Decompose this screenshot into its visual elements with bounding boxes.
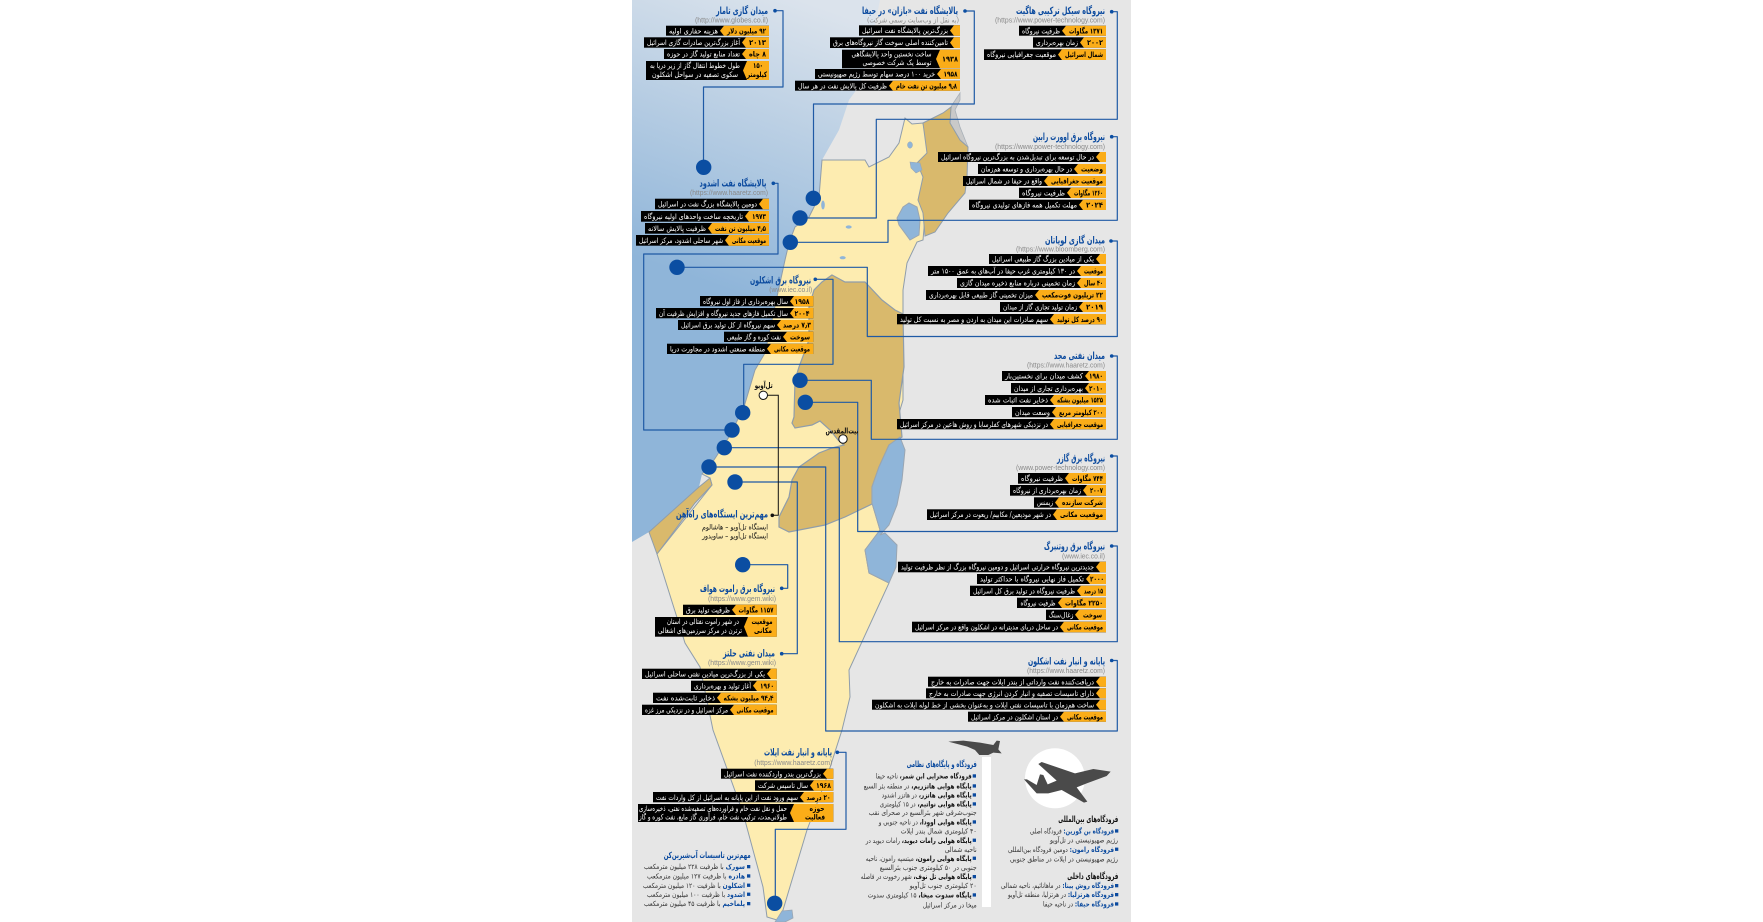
panel: Ramot Hovav power plant — [655, 582, 777, 637]
data rows: ظرفیت نیروگاه — [1020, 598, 1056, 607]
data rows: بزرگ‌ترین پالایشگاه نفت اسرائیل — [862, 25, 948, 35]
data rows: ۲۲ تریلیون فوت‌مکعب — [1042, 291, 1103, 300]
domestic airports list: فرودگاه روش پینا: در ماهانائیم، ناحیه شمالی — [1001, 881, 1114, 890]
data rows — [938, 152, 1106, 210]
data rows: در ساحل دریای مدیترانه در اشکلون واقع در مرکز اسرائیل — [915, 623, 1058, 632]
leader line: Rutenberg — [724, 448, 1117, 642]
data rows: منطقه صنعتی اشدود در مجاورت دریا — [670, 344, 765, 353]
data rows: ظرفیت نیروگاه — [1022, 26, 1060, 35]
base list: جنوبی در ۵۰ کیلومتری جنوب بئرالسبع — [880, 864, 977, 872]
data rows: ۲۰۰۷ — [1090, 486, 1103, 495]
data rows: کشف میدان برای نخستین‌بار — [1004, 372, 1083, 381]
data rows: آغاز بزرگ‌ترین صادرات گازی اسرائیل — [647, 37, 741, 47]
data rows: موقعیت مکانی — [736, 705, 774, 714]
data rows: طولانی‌مدت، ترکیب نفت خام، فرآوری گاز مایع، نفت کوره و گاز — [638, 812, 787, 822]
station list — [701, 521, 768, 541]
source: (http://www.globes.co.il) — [695, 18, 768, 24]
data rows: موقعیت جغرافیایی — [1051, 177, 1103, 186]
leader line: Gezer — [805, 402, 1117, 532]
source: (www.iec.co.il) — [769, 287, 812, 294]
base list: فرودگاه صحرایی ابن شمر، ناحیه حیفا — [876, 772, 972, 780]
data rows: تامین‌کننده اصلی سوخت گاز نیروگاه‌های برق — [833, 38, 948, 47]
data rows — [656, 296, 813, 354]
panel: Ashkelon power plant — [656, 273, 813, 354]
source: (www.power-technology.com) — [1016, 465, 1105, 472]
data rows: موقعیت جغرافیایی — [1057, 420, 1103, 429]
data rows: شهر ساحلی اشدود، مرکز اسرائیل — [639, 236, 723, 245]
base list: پایگاه هوایی تل نوف، شهر رخووت در فاصله — [861, 872, 972, 881]
data rows: بهره‌برداری تجاری از میدان — [1014, 384, 1083, 393]
source: (https://www.haaretz.com) — [1027, 362, 1105, 370]
data rows: ظرفیت نیروگاه — [1021, 474, 1063, 483]
data rows: ۱۹۷۳ — [752, 212, 766, 221]
data rows: ترترن در مرکز سرزمین‌های اشغالی — [658, 626, 742, 635]
leader line: Heletz — [735, 482, 797, 654]
data rows: موقعیت — [752, 617, 773, 626]
data rows: ۱۹۸۰ — [1089, 372, 1103, 381]
source: (https://www.power-technology.com) — [995, 18, 1105, 24]
data rows: موقعیت مکانی — [1067, 712, 1103, 721]
data rows: زمان بهره‌برداری از نیروگاه — [1013, 486, 1081, 495]
white vertical strip — [982, 757, 991, 907]
data rows: هزینه حفاری اولیه — [669, 26, 718, 35]
data rows: در حال توسعه برای تبدیل‌شدن به بزرگ‌ترین نیروگاه اسرائیل — [941, 152, 1094, 162]
data rows: کیلومتر — [746, 70, 767, 79]
icon: fighter jet — [948, 741, 1002, 755]
data rows: ۱۹۵۸ — [944, 70, 958, 79]
data rows: حمل و نقل نفت خام و فراورده‌های تصفیه‌شده نفتی، ذخیره‌سازی — [639, 804, 787, 813]
base list: پایگاه هوایی هاتزریم، در منطقه بئر السبع — [864, 782, 972, 790]
leader line: Ashdod refinery — [644, 183, 778, 430]
leader line: Eilat — [775, 752, 846, 903]
data rows: ۱۹۳۸ — [942, 55, 958, 64]
data rows: یکی از میادین بزرگ گاز طبیعی اسرائیل — [992, 254, 1094, 264]
domestic airports list — [1001, 881, 1118, 908]
data rows: ۱۹۶۸ — [816, 781, 831, 790]
data rows: ۱۵۰ — [753, 61, 763, 70]
data rows: ۱۲۶۰ مگاوات — [1074, 188, 1103, 197]
data rows: موقعیت مکانی — [774, 344, 810, 353]
data rows: زمان تولید تجاری گاز از میدان — [1003, 303, 1077, 312]
base list: ناحیه شمالی — [945, 846, 977, 854]
data rows: دارای تاسیسات تصفیه و انبار کردن انرژی جهت صادرات به خارج — [929, 689, 1094, 698]
data rows: ۷٫۳ درصد — [783, 321, 811, 330]
data rows: سکوی تصفیه در سواحل اشکلون — [652, 70, 738, 79]
data rows: ۲۰۱۹ — [1086, 303, 1103, 312]
data rows: مرکز اسرائیل و در نزدیکی مرز غزه — [645, 705, 728, 714]
station list: ایستگاه تل‌آویو – ساویدور — [701, 531, 768, 541]
data rows: ۹۲ میلیون دلار — [726, 26, 766, 35]
international airports list: رژیم صهیونیستی در تل‌آویو — [1049, 836, 1118, 844]
data rows: سال تکمیل فازهای جدید نیروگاه و افزایش ظرفیت آن — [659, 308, 788, 318]
city: Tel Aviv: تل‌آویو — [754, 380, 773, 390]
leader line: Leviathan — [677, 241, 1117, 336]
data rows: جدیدترین نیروگاه حرارتی اسرائیل و دومین نیروگاه بزرگ از نظر ظرفیت تولید — [901, 562, 1094, 572]
leader line: Ramot Hovav — [743, 565, 788, 588]
source: (www.iec.co.il) — [1062, 554, 1105, 560]
data rows: سهم ورود نفت از این پایانه به اسرائیل از کل واردات نفت — [656, 793, 798, 802]
data rows — [984, 26, 1106, 60]
data rows: بزرگ‌ترین بندر واردکننده نفت اسرائیل — [724, 768, 821, 778]
data rows: توسط یک شرکت خصوصی — [862, 58, 932, 67]
source: (https://www.power-technology.com) — [995, 144, 1105, 151]
panel: Heletz oil field — [642, 649, 777, 715]
data rows: سوخت — [790, 332, 810, 341]
heading: مهم‌ترین ایستگاه‌های راه‌آهن — [676, 508, 768, 521]
source: (https://www.haaretz.com) — [690, 190, 768, 197]
heading: نیروگاه برق روتنبرگ — [1044, 540, 1105, 552]
data rows: ۱۹۶۰ — [760, 681, 774, 690]
station list: ایستگاه تل‌آویو – هاشالوم — [702, 521, 768, 531]
source: (https://www.gem.wiki) — [708, 596, 776, 603]
data rows: دریافت‌کننده نفت وارداتی از بندر ایلات جهت صادرات به خارج — [931, 677, 1094, 686]
data rows: در ۱۳۰ کیلومتری غرب حیفا در آب‌های به عمق ۱۵۰۰ متر — [930, 266, 1075, 276]
international airports list — [1008, 826, 1118, 864]
data rows: دومین پالایشگاه بزرگ نفت در اسرائیل — [658, 199, 757, 209]
base list: پایگاه هوایی نواتیم، در ۱۵ کیلومتری — [880, 800, 972, 808]
data rows — [638, 768, 833, 822]
base list: جنوب‌شرقی شهر بئرالسبع در صحرای نقب — [869, 809, 977, 817]
data rows: شرکت سازنده — [1062, 498, 1103, 507]
data rows: زغال‌سنگ — [1048, 610, 1074, 619]
data rows: زمان بهره‌برداری — [1036, 38, 1078, 47]
data rows: در حال بهره‌برداری و توسعه هم‌زمان — [981, 165, 1072, 174]
leader line: Bazan — [814, 11, 974, 198]
data rows: ۱۹۵۸ — [794, 297, 810, 306]
international airports list: رژیم صهیونیستی در ایلات در مناطق جنوبی — [1010, 856, 1118, 864]
heading: مهم‌ترین تاسیسات آب‌شیرین‌کن — [664, 849, 751, 861]
source: (https://www.haaretz.com) — [754, 760, 832, 767]
data rows — [898, 562, 1106, 632]
data rows: ۸ چاه — [749, 50, 766, 59]
city: Jerusalem: بیت‌المقدس — [826, 426, 858, 436]
data rows: ظرفیت نیروگاه — [1022, 188, 1065, 197]
source: (به نقل از وب‌سایت رسمی شرکت) — [867, 16, 959, 24]
data rows: موقعیت مکانی — [732, 236, 766, 245]
heading: international airports: فرودگاه‌های بین‌المللی — [1058, 814, 1118, 825]
data rows: ۲۰ درصد — [806, 793, 830, 802]
data rows: ۱۵۲۵ میلیون بشکه — [1057, 396, 1103, 405]
heading: domestic airports: فرودگاه‌های داخلی — [1067, 871, 1118, 882]
domestic airports list: فرودگاه هرتزلیا: در هرتزلیا، منطقه تل‌آویو — [1007, 890, 1114, 899]
location markers — [669, 9, 1113, 911]
data rows: ۱۱۵۷ مگاوات — [738, 605, 774, 614]
data rows: وضعیت — [1081, 165, 1103, 174]
data rows: تکمیل فاز نهایی نیروگاه با حداکثر تولید — [980, 575, 1084, 584]
heading: نیروگاه برق اشکلون — [750, 273, 811, 286]
data rows: طول خطوط انتقال گاز از زیر دریا به — [650, 61, 740, 70]
heading: نیروگاه برق راموت هواف — [700, 582, 775, 595]
data rows: ۲۲۵۰ مگاوات — [1065, 598, 1103, 607]
data rows: ذخایر نفت اثبات شده — [988, 396, 1048, 405]
panel: Ashdod refinery — [636, 177, 769, 246]
data rows: شمال اسرائیل — [1065, 50, 1103, 59]
panel: Leviathan gas field — [897, 234, 1106, 324]
city: Tel Aviv — [754, 380, 773, 399]
plant list — [643, 863, 750, 908]
data rows — [642, 668, 777, 715]
data rows: در نزدیکی شهرهای کفلرسابا و روش هاعین در مرکز اسرائیل — [900, 420, 1048, 429]
data rows: در شهر راموت نفتالی در استان — [667, 617, 739, 626]
panel: railway stations — [676, 508, 768, 541]
data rows: موقعیت مکانی — [1067, 623, 1103, 632]
data rows — [655, 605, 777, 637]
data rows: ۱۵ درصد — [1084, 586, 1103, 595]
data rows: ۲۰۲۴ — [1086, 200, 1103, 209]
panel: Bazan refinery — [795, 4, 960, 91]
leader line: Ashkelon terminal — [709, 467, 1117, 731]
data rows: موقعیت جغرافیایی نیروگاه — [987, 50, 1056, 59]
data rows: ۹۴٫۴ میلیون بشکه — [724, 693, 774, 702]
data rows: سهم نیروگاه از کل تولید برق اسرائیل — [681, 321, 775, 330]
data rows: سوخت — [1083, 610, 1102, 619]
data rows — [644, 26, 769, 80]
heading: فرودگاه و پایگاه‌های نظامی — [907, 759, 977, 770]
leader line: Hagit — [800, 12, 1117, 218]
heading: میدان نفتی مجد — [1054, 351, 1105, 362]
leader line: railway — [767, 395, 778, 515]
data rows: ساخت نخستین واحد پالایشگاهی — [852, 50, 932, 59]
data rows: ظرفیت تولید برق — [686, 605, 730, 614]
data rows: در استان اشکلون در مرکز اسرائیل — [971, 712, 1058, 721]
leader line: Ashkelon power plant — [744, 279, 833, 413]
data rows: ۲۰۱۰ — [1089, 384, 1103, 393]
base list: پایگاه هوایی اووِدا، در ناحیه جنوبی و — [878, 818, 972, 827]
data rows: سال تاسیس شرکت — [758, 781, 808, 790]
data rows: میزان تخمینی گاز طبیعی قابل بهره‌برداری — [929, 291, 1033, 300]
data rows: یکی از بزرگ‌ترین میادین نفتی ساحلی اسرائیل — [645, 668, 765, 678]
plant list: پلماخیم با ظرفیت ۴۵ میلیون مترمکعب — [644, 900, 745, 908]
data rows: نفت کوره و گاز طبیعی — [727, 332, 781, 341]
source: (https://www.haaretz.com) — [1027, 668, 1105, 675]
data rows: سهم صادرات این میدان به اردن و مصر به نسبت کل تولید — [900, 315, 1048, 324]
panel: Meged oil field — [897, 351, 1106, 429]
base list: ۲۰ کیلومتری جنوب تل‌آویو — [909, 881, 977, 890]
leader line: Rabin — [790, 137, 1117, 242]
source: (https://www.gem.wiki) — [708, 660, 776, 667]
plant list: اشکلون با ظرفیت ۱۲۰ میلیون مترمکعب — [643, 882, 745, 890]
source: (https://www.bloomberg.com) — [1016, 246, 1105, 254]
data rows: حوزه — [810, 804, 824, 813]
panel: civil airports — [1001, 748, 1118, 908]
data rows: ۲۰۰ کیلومتر مربع — [1059, 408, 1103, 417]
data rows: ۷۴۴ مگاوات — [1072, 474, 1103, 483]
data rows: ۲۰۱۳ — [749, 38, 766, 47]
data rows: در شهر مودیعین/ مکابیم/ ریعوت در مرکز اسرائیل — [930, 510, 1051, 519]
heading: پایانه و انبار نفت ایلات — [764, 748, 832, 759]
data rows: ۹۰ درصد کل تولید — [1057, 315, 1103, 324]
data rows — [897, 371, 1106, 429]
city: Jerusalem — [826, 426, 858, 443]
data rows — [636, 199, 769, 246]
data rows: خرید ۱۰۰ درصد سهام توسط رژیم صهیونیستی — [818, 70, 935, 79]
base list: پایگاه هوایی هاتزر، در هاتزر اشدود — [882, 790, 972, 800]
heading: میدان گازی لویاتان — [1045, 234, 1105, 246]
data rows — [872, 677, 1106, 722]
leader line: Tamar — [704, 11, 783, 167]
data rows: ۲۰۰۲ — [1087, 38, 1103, 47]
international airports list: فرودگاه رامون: دومین فرودگاه بین‌المللی — [1008, 845, 1114, 854]
data rows: موقعیت مکانی — [1060, 510, 1103, 519]
heading: پالایشگاه نفت «بازان» در حیفا — [862, 4, 958, 17]
data rows: تاریخچه ساخت واحدهای اولیه نیروگاه — [644, 212, 743, 221]
data rows: مکانی — [754, 626, 772, 635]
data rows: زیمنس — [1037, 498, 1053, 507]
data rows: ظرفیت پالایش سالانه — [648, 224, 706, 233]
icon: airliner on white circle — [1024, 748, 1111, 808]
data rows: ۴۰ سال — [1084, 279, 1103, 288]
heading: میدان گازی تامار — [715, 4, 768, 17]
data rows: ظرفیت نیروگاه در تولید برق کل اسرائیل — [973, 586, 1075, 595]
plant list: هادره با ظرفیت ۱۲۷ میلیون مترمکعب — [647, 872, 745, 880]
data rows: زمان تخمینی درباره منابع ذخیره میدان گازی — [960, 279, 1075, 288]
panel: desalination plants — [643, 849, 751, 908]
data rows: سال بهره‌برداری از فاز اول نیروگاه — [703, 297, 788, 306]
heading: نیروگاه سیکل ترکیبی هاگیت — [1016, 4, 1105, 17]
leader line: Meged — [800, 356, 1117, 439]
data rows — [795, 25, 960, 91]
panel: Gezer power plant — [927, 452, 1106, 520]
data rows — [927, 473, 1106, 520]
heading: پایانه و انبار نفت اشکلون — [1028, 656, 1105, 668]
base list: پایگاه هوایی رامون، میتسپه رامون، ناحیه — [866, 854, 972, 863]
base list: میخا در مرکز اسرائیل — [923, 902, 977, 910]
domestic airports list: فرودگاه حیفا: در ناحیه حیفا — [1043, 900, 1114, 908]
panel: Tamar gas field — [644, 4, 769, 80]
base list: ۴۰ کیلومتری شمال بندر ایلات — [901, 828, 977, 836]
data rows: ذخایر ثابت‌شده نفت — [656, 693, 715, 702]
panel: military airfields and bases — [861, 741, 1002, 910]
plant list: سورک با ظرفیت ۲۲۸ میلیون مترمکعب — [644, 863, 745, 871]
data rows: ۴٫۵ میلیون تن نفت — [715, 224, 766, 233]
panel: Rutenberg power plant — [898, 540, 1106, 632]
heading: پالایشگاه نفت اشدود — [700, 177, 767, 190]
base list: پایگاه سدوت میخا، ۱۵ کیلومتری سدوت — [868, 890, 972, 900]
data rows: ۲۰۰۴ — [794, 309, 810, 318]
data rows: ۱۳۷۱ مگاوات — [1069, 26, 1103, 35]
heading: نیروگاه برق گازر — [1056, 452, 1105, 464]
base list — [861, 772, 977, 910]
data rows: ۲۰۰۰ — [1090, 575, 1104, 584]
map of the region — [632, 0, 1131, 922]
heading: نیروگاه برق اوورت رابین — [1033, 130, 1105, 143]
data rows: موقعیت — [1084, 267, 1103, 276]
plant list: اشدود با ظرفیت ۱۰۰ میلیون مترمکعب — [647, 891, 745, 899]
panel: Hagit combined cycle plant — [984, 4, 1106, 60]
panel: Orot Rabin power plant — [938, 130, 1106, 210]
data rows: مهلت تکمیل همه فازهای تولیدی نیروگاه — [972, 200, 1077, 209]
panel: Eilat oil terminal — [638, 748, 833, 822]
heading: میدان نفتی حلتز — [722, 649, 775, 660]
data rows: آغاز تولید و بهره‌برداری — [694, 680, 752, 690]
data rows: ۹٫۸ میلیون تن نفت خام — [896, 81, 957, 90]
data rows — [897, 254, 1106, 324]
data rows: ساخت هم‌زمان با تاسیسات نفتی ایلات و به‌عنوان بخشی از خط لوله ایلات به اشکلون — [875, 700, 1094, 709]
base list: پایگاه هوایی رامات دیوید، رامات دیوید در — [865, 836, 972, 845]
panel: Ashkelon oil terminal — [872, 656, 1106, 722]
data rows: وسعت میدان — [1015, 408, 1050, 417]
international airports list: فرودگاه بن گورین: فرودگاه اصلی — [1030, 826, 1114, 836]
data rows: فعالیت — [805, 813, 825, 822]
data rows: تعداد منابع تولید گاز در حوزه — [667, 50, 740, 59]
data rows: ظرفیت کل پالایش نفت در هر سال — [798, 81, 887, 90]
data rows: واقع در حیفا در شمال اسرائیل — [966, 177, 1042, 186]
